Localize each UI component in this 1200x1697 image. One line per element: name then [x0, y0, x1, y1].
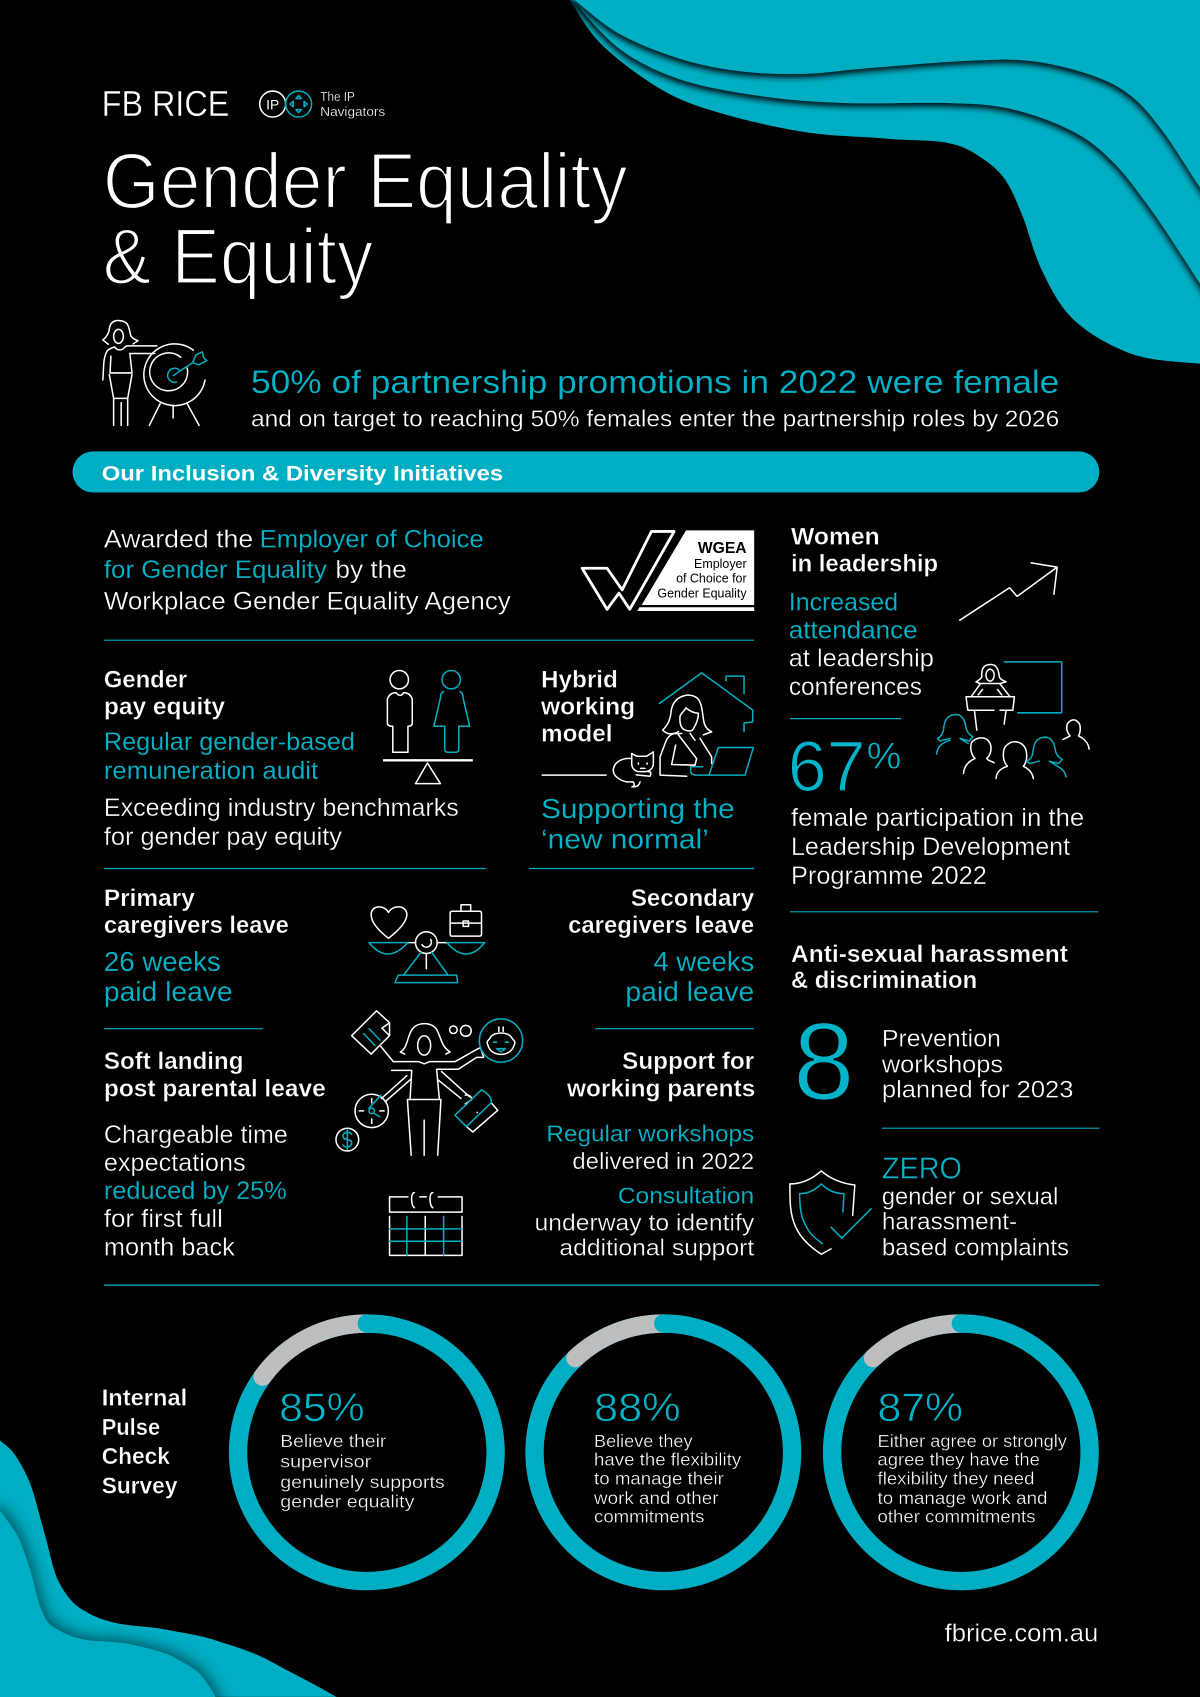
panel: hybrid working model	[540, 666, 735, 854]
heading: internal pulse check survey: Pulse	[102, 1414, 160, 1440]
icon: rising arrow	[960, 563, 1057, 620]
panel: women in leadership: Increased	[789, 588, 898, 616]
icon: conference audience	[937, 662, 1089, 778]
panel: primary caregivers leave: caregivers leave	[104, 912, 289, 939]
stat: zero complaints	[882, 1153, 1069, 1261]
donut chart: 88 percent: to manage their	[594, 1469, 724, 1489]
panel: support for working parents: working parents	[566, 1075, 755, 1102]
panel: gender pay equity	[104, 666, 459, 851]
stat: zero complaints: harassment-	[882, 1208, 1017, 1235]
panel: primary caregivers leave	[104, 885, 289, 1007]
badge: WGEA: Employer	[694, 557, 747, 571]
panel: soft landing post parental leave: Soft landing	[104, 1048, 243, 1075]
donut chart: 88 percent: Believe they	[594, 1431, 693, 1451]
donut chart: 87 percent: 87%	[878, 1386, 963, 1430]
panel: primary caregivers leave: paid leave	[104, 976, 233, 1007]
panel: women in leadership: Women	[791, 523, 880, 550]
badge: WGEA: of Choice for	[676, 571, 747, 585]
donut chart: 85 percent: Believe their	[280, 1431, 386, 1451]
panel: secondary caregivers leave: Secondary	[631, 885, 755, 912]
icon: calendar	[390, 1193, 462, 1255]
logo: IP Navigators	[260, 89, 386, 119]
panel: soft landing post parental leave: Chargeable time	[104, 1121, 288, 1149]
donut chart: 88 percent: work and other	[593, 1488, 719, 1508]
panel: gender pay equity: Gender	[104, 666, 187, 693]
donut chart: 87 percent: to manage work and	[878, 1488, 1047, 1508]
stat: 8 prevention workshops: planned for 2023	[882, 1076, 1073, 1103]
stat: 8 prevention workshops: Prevention	[882, 1026, 1001, 1053]
decorative wave: bottom left	[0, 1440, 337, 1697]
panel: women in leadership: at leadership	[789, 645, 934, 673]
panel: support for working parents: delivered in 2022	[572, 1148, 754, 1174]
donut chart: 88 percent: commitments	[594, 1507, 705, 1527]
stat: 67 percent: 67	[788, 727, 866, 807]
title	[103, 136, 628, 301]
badge: WGEA: Gender Equality	[657, 586, 747, 600]
donut chart: 85 percent	[238, 1324, 496, 1581]
headline stat	[251, 364, 1059, 431]
panel: primary caregivers leave: 26 weeks	[104, 946, 221, 977]
logo: FB Rice: FB RICE	[102, 84, 229, 124]
panel: support for working parents: Regular workshops	[546, 1121, 754, 1147]
title: Gender Equality	[103, 136, 628, 225]
panel: soft landing post parental leave: reduced by 25%	[104, 1177, 287, 1205]
icon: woman with target	[103, 320, 207, 425]
panel: support for working parents: underway to identify	[535, 1209, 755, 1235]
logo: IP Navigators: Navigators	[320, 104, 386, 119]
panel: hybrid working model: working	[540, 693, 635, 720]
panel: women in leadership: attendance	[789, 617, 918, 645]
panel: anti-sexual harassment and discrimination	[791, 941, 1068, 994]
donut chart: 85 percent: genuinely supports	[280, 1472, 445, 1492]
icon: woman working at home with cat	[542, 673, 753, 787]
stat: 67 percent: %	[867, 735, 901, 776]
stat: 67 percent: female participation in the	[791, 804, 1084, 832]
panel: gender pay equity: pay equity	[104, 693, 226, 720]
text: employer of choice award: for Gender Equality	[104, 556, 327, 584]
stat: 8 prevention workshops	[793, 1001, 1073, 1124]
stat: 67 percent: Leadership Development	[791, 833, 1070, 861]
text: employer of choice award	[104, 526, 511, 615]
section banner: Our Inclusion & Diversity Initiatives	[102, 461, 503, 486]
logo: IP Navigators: IP	[266, 96, 279, 112]
panel: soft landing post parental leave: month back	[104, 1233, 235, 1261]
panel: support for working parents	[535, 1048, 755, 1260]
panel: women in leadership	[789, 523, 938, 701]
panel: hybrid working model: ‘new normal’	[541, 823, 709, 854]
panel: secondary caregivers leave: caregivers leave	[568, 912, 754, 939]
donut chart: 85 percent: gender equality	[280, 1491, 415, 1511]
panel: secondary caregivers leave	[568, 885, 755, 1007]
stat: zero complaints: based complaints	[882, 1234, 1069, 1261]
panel: gender pay equity: Regular gender-based	[104, 728, 355, 756]
badge: WGEA	[582, 530, 754, 611]
donut chart: 88 percent: have the flexibility	[594, 1449, 742, 1469]
decorative wave: top right	[570, 0, 1200, 364]
panel: primary caregivers leave: Primary	[104, 885, 196, 912]
panel: anti-sexual harassment and discrimination: & discrimination	[791, 967, 977, 994]
donut chart: 87 percent	[832, 1324, 1090, 1581]
panel: soft landing post parental leave: for first full	[104, 1205, 223, 1233]
panel: gender pay equity: remuneration audit	[104, 757, 318, 785]
icon: man and woman on balance	[383, 671, 473, 784]
text: employer of choice award: Workplace Gender Equality Agency	[104, 587, 511, 615]
section banner	[72, 451, 1099, 493]
icon: scales heart and briefcase	[369, 905, 485, 983]
stat: 8 prevention workshops: workshops	[881, 1051, 1003, 1078]
panel: soft landing post parental leave: expectations	[104, 1149, 246, 1177]
donut chart: 85 percent: supervisor	[280, 1451, 371, 1471]
stat: 67 percent	[788, 727, 1084, 890]
text: employer of choice award: Employer of Choice	[260, 526, 484, 554]
donut chart: 87 percent: Either agree or strongly	[878, 1431, 1067, 1451]
donut chart: 87 percent: agree they have the	[878, 1449, 1040, 1469]
title: & Equity	[103, 212, 374, 301]
panel: gender pay equity: for gender pay equity	[104, 823, 343, 851]
donut chart: 88 percent	[535, 1324, 792, 1581]
panel: women in leadership: conferences	[789, 673, 922, 701]
panel: women in leadership: in leadership	[791, 550, 938, 577]
heading: internal pulse check survey: Survey	[102, 1472, 178, 1498]
icon: shield with check	[790, 1171, 871, 1254]
panel: secondary caregivers leave: paid leave	[625, 976, 754, 1007]
badge: WGEA: WGEA	[698, 540, 747, 557]
headline stat: 50% of partnership promotions in 2022 were female	[251, 364, 1059, 400]
panel: hybrid working model: model	[541, 720, 612, 747]
panel: hybrid working model: Supporting the	[541, 793, 735, 824]
stat: zero complaints: gender or sexual	[882, 1183, 1058, 1210]
panel: support for working parents: Consultation	[618, 1182, 754, 1208]
stat: zero complaints: ZERO	[882, 1153, 962, 1186]
logo: IP Navigators: The IP	[320, 89, 355, 104]
text: employer of choice award: by the	[335, 556, 407, 584]
panel: gender pay equity: Exceeding industry benchmarks	[104, 794, 459, 822]
panel: support for working parents: additional support	[559, 1234, 755, 1260]
donut chart: 85 percent: 85%	[279, 1386, 365, 1430]
stat: 67 percent: Programme 2022	[791, 862, 987, 890]
donut chart: 87 percent: other commitments	[878, 1507, 1036, 1527]
headline stat: and on target to reaching 50% females enter the partnership roles by 2026	[251, 405, 1059, 431]
panel: soft landing post parental leave	[104, 1048, 326, 1261]
panel: soft landing post parental leave: post parental leave	[104, 1075, 326, 1102]
panel: support for working parents: Support for	[622, 1048, 754, 1075]
donut chart: 87 percent: flexibility they need	[878, 1469, 1034, 1489]
text: employer of choice award: Awarded the	[104, 526, 253, 554]
stat: 8 prevention workshops: 8	[793, 1001, 855, 1124]
panel: hybrid working model: Hybrid	[541, 666, 618, 693]
website: fbrice.com.au	[945, 1620, 1098, 1648]
heading: internal pulse check survey	[102, 1385, 187, 1498]
heading: internal pulse check survey: Internal	[102, 1385, 187, 1411]
heading: internal pulse check survey: Check	[102, 1443, 170, 1469]
donut chart: 88 percent: 88%	[594, 1386, 681, 1430]
panel: secondary caregivers leave: 4 weeks	[654, 946, 754, 977]
icon: woman juggling work and family	[336, 1011, 523, 1155]
panel: anti-sexual harassment and discrimination: Anti-sexual harassment	[791, 941, 1068, 968]
